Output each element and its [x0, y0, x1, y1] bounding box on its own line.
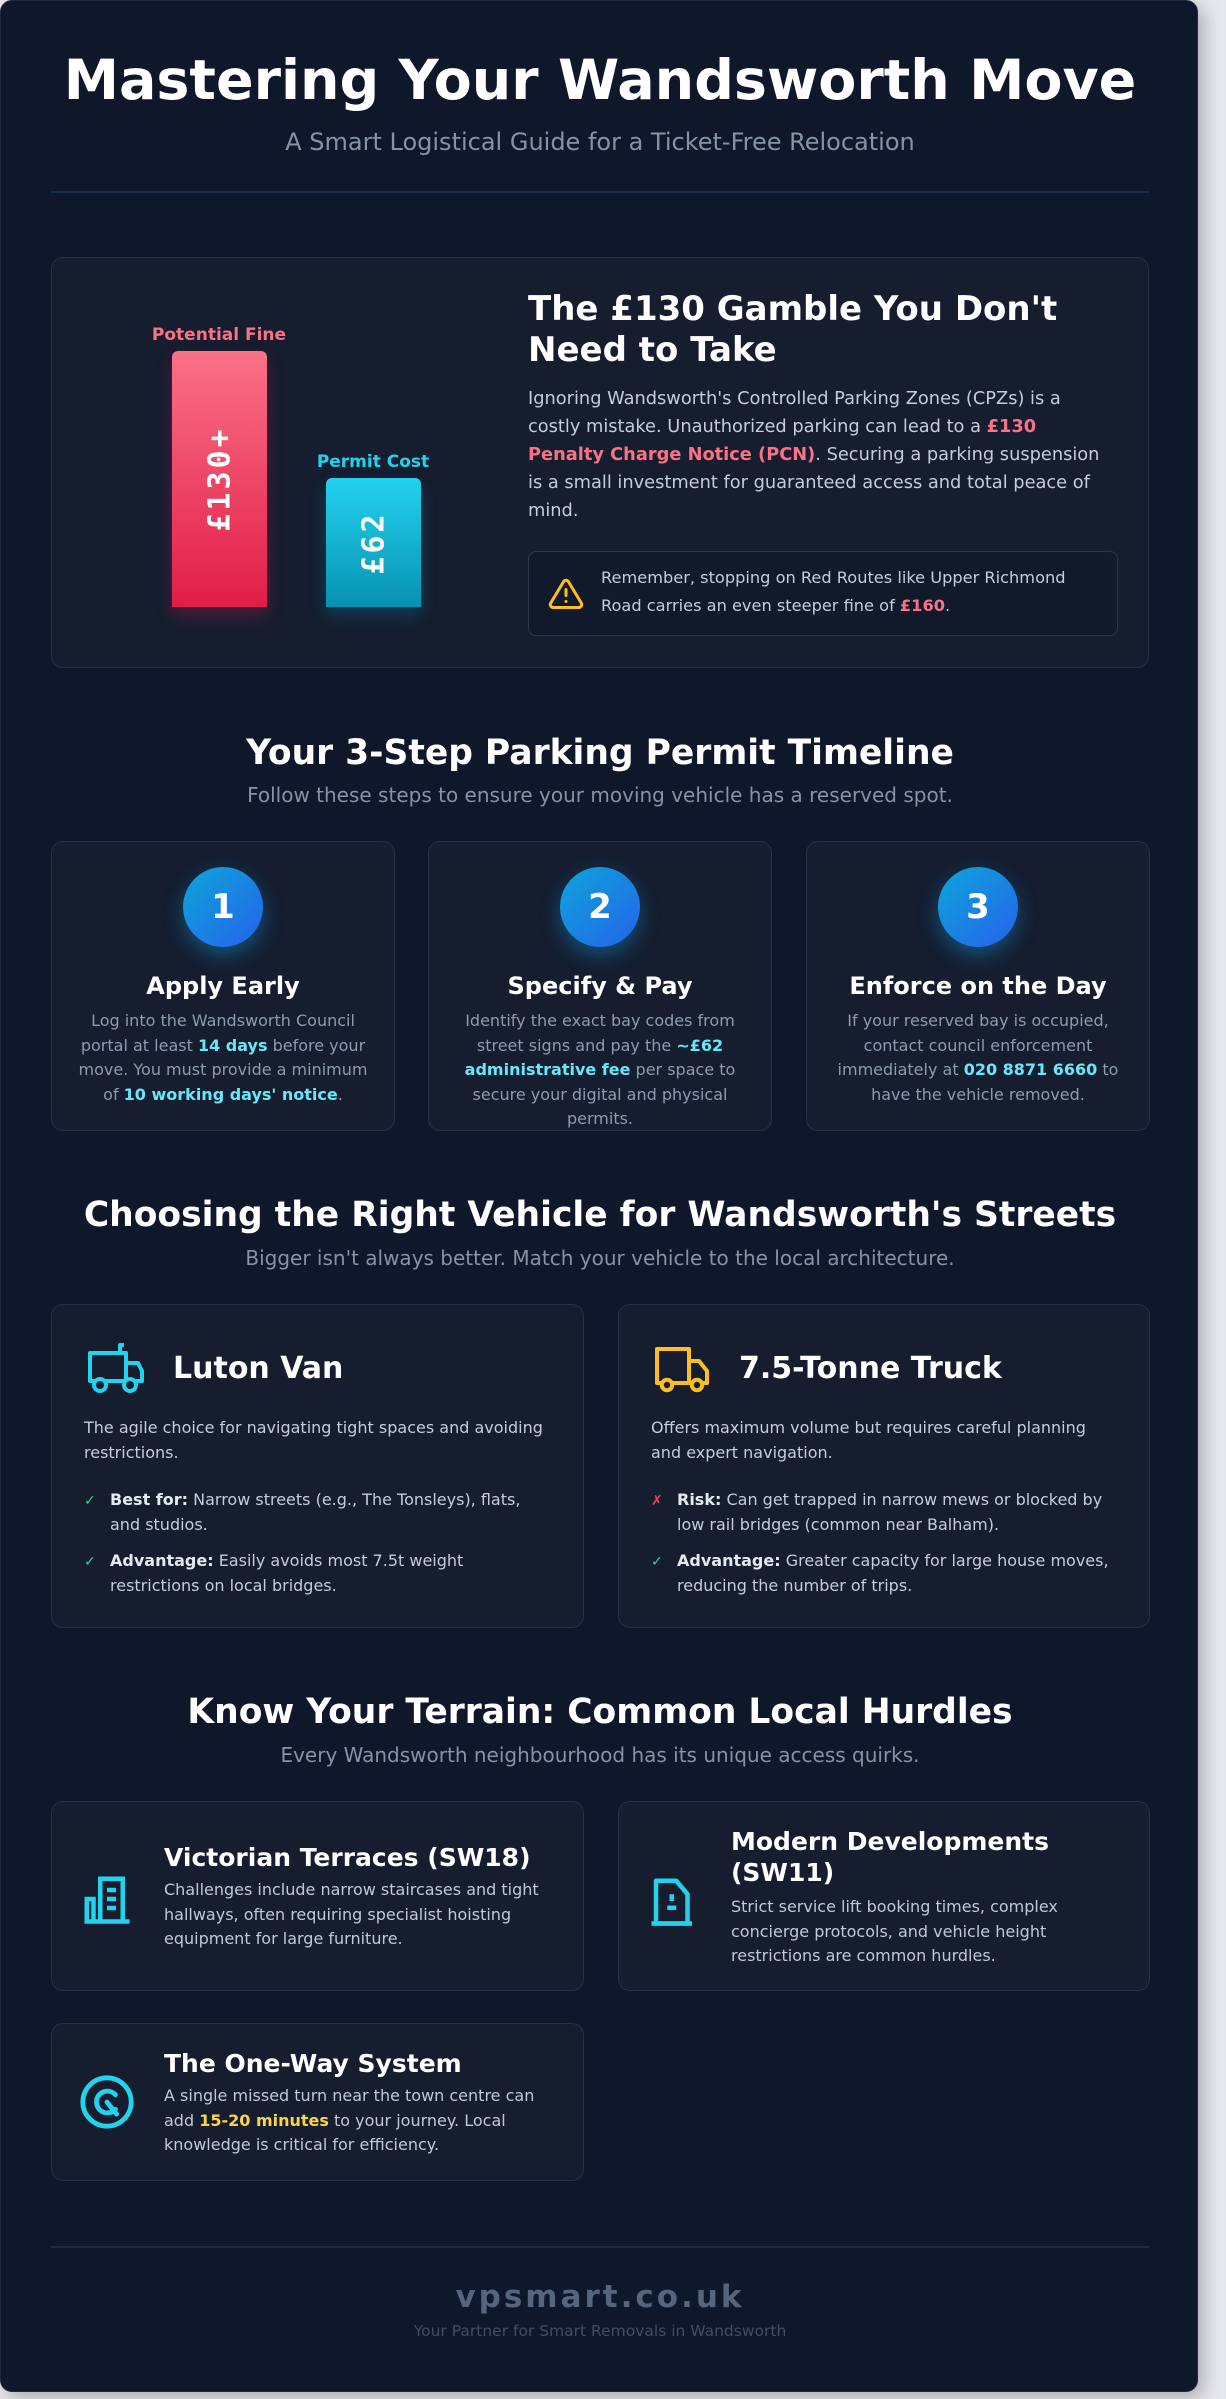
bar: fine: £130+: [202, 426, 237, 532]
panel: luton van: The agile choice for navigating tight spaces and avoiding restrictions.: [84, 1418, 543, 1462]
panel: modern: Modern Developments (SW11): [731, 1827, 1049, 1887]
icon: 2: 2: [588, 887, 612, 927]
label: potential fine: Potential Fine: [152, 325, 286, 345]
panel: truck: 7.5-Tonne Truck: [739, 1351, 1002, 1386]
panel: step 3: If your reserved bay is occupied, contact council enforcement immediately at 020 8871 6660 to have the vehicle removed.: [838, 1011, 1118, 1104]
subheading: timeline: Follow these steps to ensure your moving vehicle has a reserved spot.: [247, 783, 953, 807]
panel: modern: Strict service lift booking times, complex concierge protocols, and vehicle height restrictions are common hurdles.: [731, 1897, 1058, 1965]
subheading: vehicles: Bigger isn't always better. Match your vehicle to the local architecture.: [245, 1246, 955, 1270]
icon: document: [652, 1878, 692, 1926]
panel: gamble: [51, 257, 1149, 668]
panel: luton van: ✓: [84, 1493, 96, 1509]
icon: 2: [560, 867, 640, 947]
panel: step 3: Enforce on the Day: [849, 972, 1107, 1000]
label: permit cost: Permit Cost: [317, 452, 429, 472]
panel: luton van: [51, 1304, 584, 1628]
panel: step 1: [51, 841, 395, 1131]
panel: victorian: Victorian Terraces (SW18): [164, 1843, 530, 1872]
bar: permit: [326, 478, 421, 607]
paragraph: Ignoring Wandsworth's Controlled Parking Zones (CPZs) is a costly mistake. Unauthorized parking can lead to a £130 Penalty Charge Notice (PCN). Securing a parking suspension is a small investment for guaranteed access and total peace of mind.: [528, 388, 1099, 521]
heading: terrain: Know Your Terrain: Common Local Hurdles: [187, 1692, 1013, 1732]
panel: victorian: Challenges include narrow staircases and tight hallways, often requiring specialist hoisting equipment for large furniture.: [164, 1880, 539, 1948]
bar: fine: [172, 351, 267, 607]
callout: red routes: [528, 551, 1118, 636]
panel: modern: [618, 1801, 1150, 1991]
panel: step 2: Identify the exact bay codes from street signs and pay the ~£62 administrative fee per space to secure your digital and physical permits.: [465, 1011, 735, 1128]
subtitle: A Smart Logistical Guide for a Ticket-Free Relocation: [285, 128, 915, 156]
panel: one-way: The One-Way System: [164, 2049, 462, 2078]
callout text: Remember, stopping on Red Routes like Upper Richmond Road carries an even steeper fine of £160.: [601, 568, 1066, 615]
panel: truck: [618, 1304, 1150, 1628]
panel: truck: ✓: [651, 1554, 663, 1570]
footer: tagline: Your Partner for Smart Removals in Wandsworth: [414, 2322, 786, 2340]
panel: step 1: Log into the Wandsworth Council portal at least 14 days before your move. You must provide a minimum of 10 working days' notice.: [79, 1011, 367, 1104]
bar: permit: £62: [356, 511, 391, 574]
icon: 3: 3: [966, 887, 990, 927]
panel: truck: ✗: [651, 1493, 663, 1509]
icon: van: [88, 1343, 144, 1393]
icon: buildings: [84, 1876, 130, 1924]
panel: one-way: A single missed turn near the town centre can add 15-20 minutes to your journey. Local knowledge is critical for efficiency.: [164, 2086, 534, 2154]
item: advantage: Advantage: Greater capacity for large house moves, reducing the number of trips.: [677, 1551, 1109, 1595]
panel: luton van: Luton Van: [173, 1351, 343, 1386]
heading: vehicles: Choosing the Right Vehicle for Wandsworth's Streets: [84, 1195, 1116, 1235]
item: advantage: Advantage: Easily avoids most 7.5t weight restrictions on local bridges.: [110, 1551, 463, 1595]
icon: warning: [548, 578, 584, 609]
panel: truck: Offers maximum volume but requires careful planning and expert navigation.: [651, 1418, 1086, 1462]
panel: step 3: [806, 841, 1150, 1131]
footer: brand: vpsmart.co.uk: [455, 2279, 745, 2315]
panel: luton van: ✓: [84, 1554, 96, 1570]
panel: step 2: [428, 841, 772, 1131]
panel: one-way: [51, 2023, 584, 2181]
icon: one-way: [80, 2075, 134, 2129]
title: Mastering Your Wandsworth Move: [64, 48, 1136, 113]
bar chart: [152, 325, 429, 624]
item: risk: Risk: Can get trapped in narrow mews or blocked by low rail bridges (common near Balham).: [677, 1490, 1102, 1534]
icon: 1: [183, 867, 263, 947]
panel: victorian: [51, 1801, 584, 1991]
heading: timeline: Your 3-Step Parking Permit Timeline: [246, 733, 954, 773]
icon: 1: 1: [211, 887, 235, 927]
item: best for: Best for: Narrow streets (e.g., The Tonsleys), flats, and studios.: [110, 1490, 520, 1534]
subheading: terrain: Every Wandsworth neighbourhood has its unique access quirks.: [280, 1743, 920, 1767]
panel: step 2: Specify & Pay: [508, 972, 692, 1000]
icon: truck: [655, 1347, 709, 1392]
panel: step 1: Apply Early: [146, 972, 300, 1000]
heading: The £130 Gamble You Don't Need to Take: [528, 289, 1057, 370]
icon: 3: [938, 867, 1018, 947]
